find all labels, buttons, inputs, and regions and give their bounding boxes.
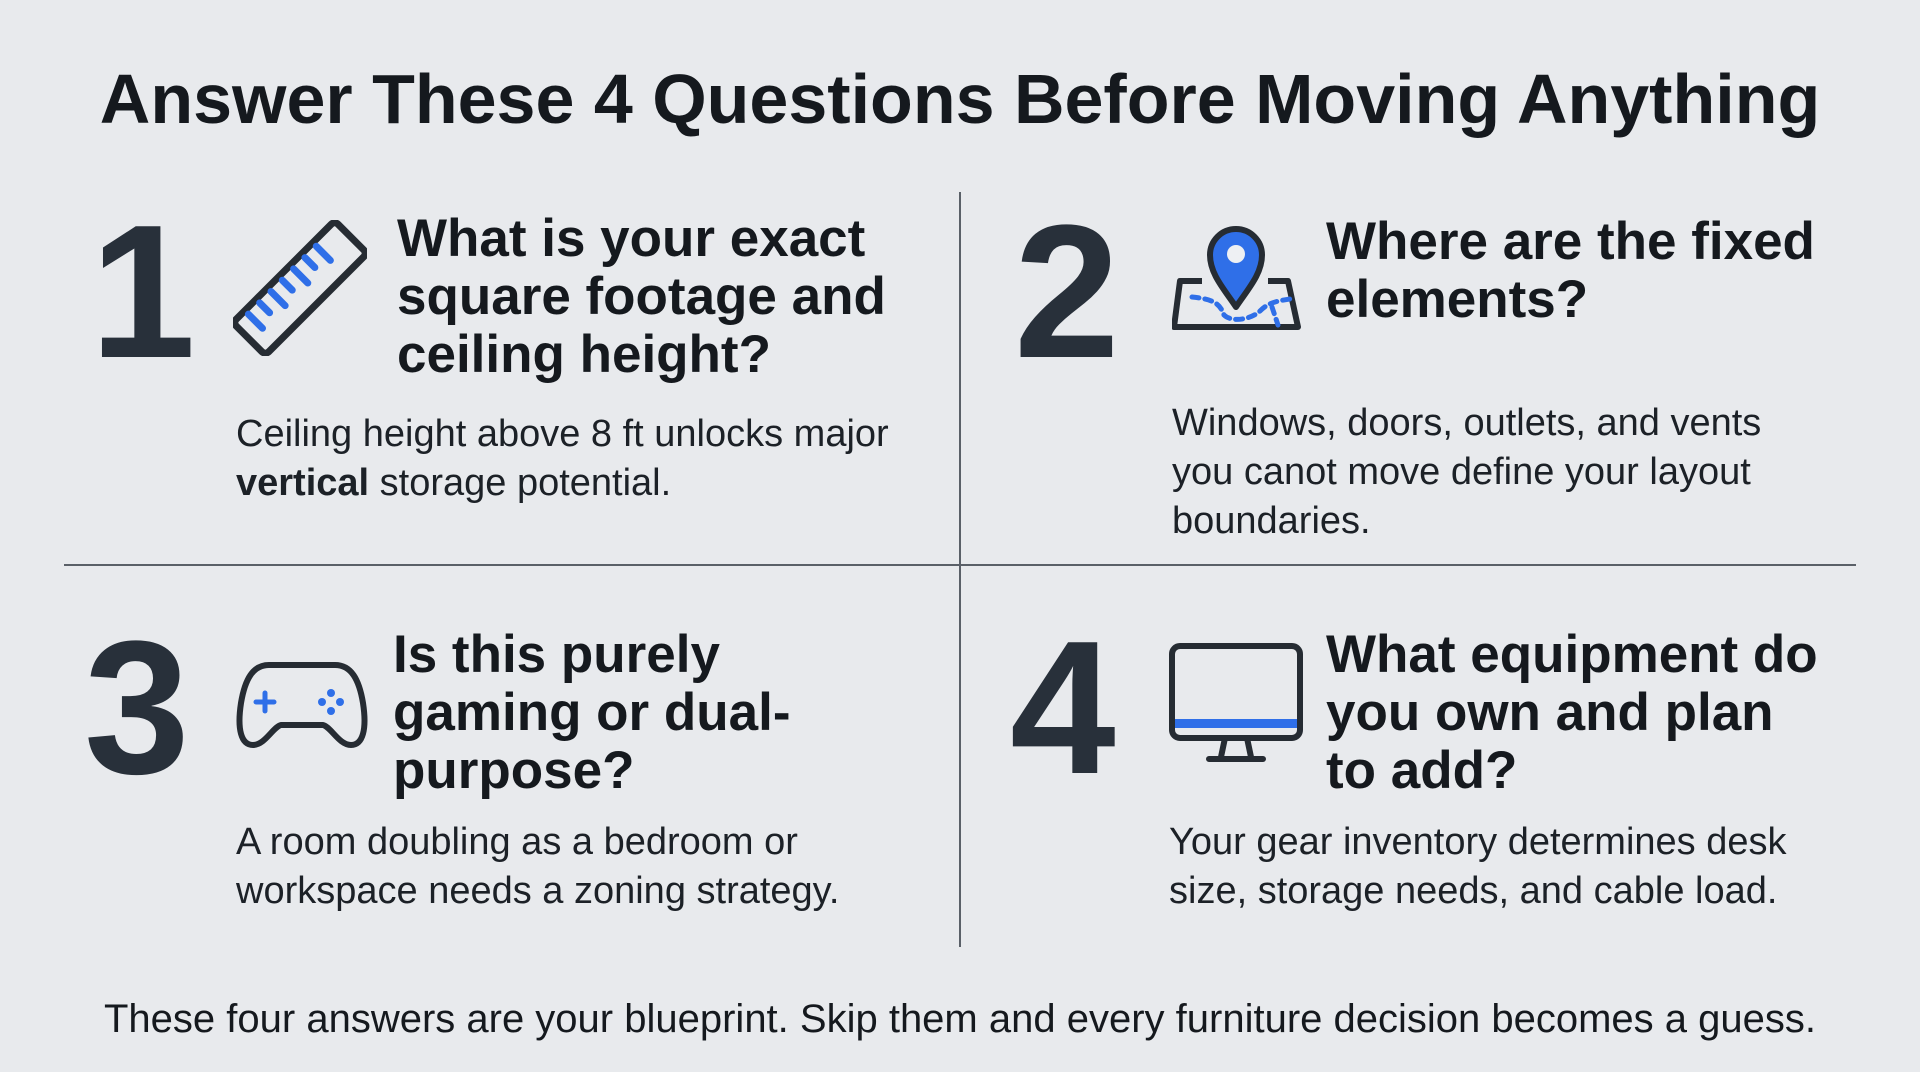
heading 4 xyxy=(1326,625,1818,800)
body 2: you canot move define your layout xyxy=(1172,451,1751,493)
panel: question 1 xyxy=(90,186,889,504)
panel: question 4 xyxy=(1010,602,1818,912)
panel: question 2 xyxy=(1014,186,1815,542)
heading 3: Is this purely xyxy=(393,625,720,684)
footer note: These four answers are your blueprint. Skip them and every furniture decision becomes a guess. xyxy=(104,997,1816,1041)
heading 1: ceiling height? xyxy=(397,325,771,384)
heading 3: purpose? xyxy=(393,741,634,800)
icon: ruler xyxy=(233,220,367,356)
body 4: Your gear inventory determines desk xyxy=(1169,821,1786,863)
heading 3 xyxy=(393,625,790,800)
body 3: workspace needs a zoning strategy. xyxy=(236,870,839,912)
heading 2: Where are the fixed xyxy=(1326,212,1815,271)
panel: question 3 xyxy=(84,602,839,912)
title: Answer These 4 Questions Before Moving Anything xyxy=(100,60,1820,138)
heading 1 xyxy=(397,209,886,384)
heading 2 xyxy=(1326,212,1815,329)
heading 4: What equipment do xyxy=(1326,625,1818,684)
heading 3: gaming or dual- xyxy=(393,683,790,742)
body 3: A room doubling as a bedroom or xyxy=(236,821,798,863)
icon: map pin xyxy=(1172,226,1301,330)
number 3: 3 xyxy=(84,602,190,814)
number 4: 4 xyxy=(1010,602,1116,814)
number 2: 2 xyxy=(1014,186,1120,398)
body 1: Ceiling height above 8 ft unlocks major xyxy=(236,413,889,455)
icon: monitor xyxy=(1169,643,1303,762)
heading 4: you own and plan xyxy=(1326,683,1774,742)
number 1: 1 xyxy=(90,186,196,398)
body 1: vertical storage potential. xyxy=(236,462,671,504)
heading 1: What is your exact xyxy=(397,209,865,268)
heading 4: to add? xyxy=(1326,741,1517,800)
heading 2: elements? xyxy=(1326,270,1588,329)
body 4: size, storage needs, and cable load. xyxy=(1169,870,1777,912)
heading 1: square footage and xyxy=(397,267,886,326)
icon: game controller xyxy=(236,662,368,748)
body 2: Windows, doors, outlets, and vents xyxy=(1172,402,1761,444)
body 4 xyxy=(1169,821,1786,912)
body 1 xyxy=(236,413,889,504)
body 2: boundaries. xyxy=(1172,500,1371,542)
body 2 xyxy=(1172,402,1761,542)
body 3 xyxy=(236,821,839,912)
